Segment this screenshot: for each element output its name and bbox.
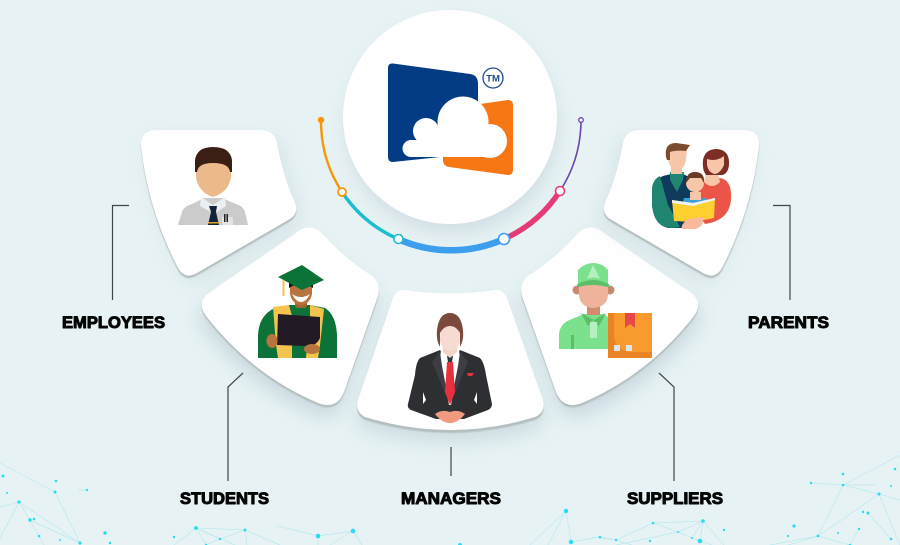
logo: blue panel	[388, 63, 478, 162]
network pattern: bottom right	[458, 455, 900, 545]
icon: employee	[178, 147, 248, 225]
leader line: employees	[112, 206, 129, 300]
icon: delivery person	[559, 263, 652, 358]
icon: graduate	[258, 265, 337, 358]
leader line: students	[228, 373, 243, 481]
card: suppliers	[521, 228, 700, 417]
leader line: suppliers	[659, 373, 674, 481]
icon: family	[652, 143, 731, 229]
leader line: parents	[773, 206, 790, 300]
label: managers: MANAGERS	[401, 490, 501, 508]
card: employees	[141, 130, 302, 284]
logo: trademark badge	[483, 68, 503, 88]
logo: orange panel	[443, 100, 513, 175]
card: students	[200, 228, 379, 417]
icon: manager	[408, 313, 492, 423]
logo: trademark badge: TM	[486, 74, 500, 84]
leader line: managers	[450, 447, 452, 476]
card: managers	[357, 290, 544, 442]
label: parents: PARENTS	[748, 314, 829, 332]
label: students: STUDENTS	[180, 490, 269, 508]
logo: cloud	[402, 96, 507, 158]
card: parents	[598, 130, 759, 284]
network pattern: bottom left	[0, 463, 362, 545]
semicircular arc timeline	[318, 117, 583, 250]
label: suppliers: SUPPLIERS	[627, 490, 723, 508]
centre circle with logo	[343, 10, 557, 232]
label: employees: EMPLOYEES	[62, 314, 165, 332]
